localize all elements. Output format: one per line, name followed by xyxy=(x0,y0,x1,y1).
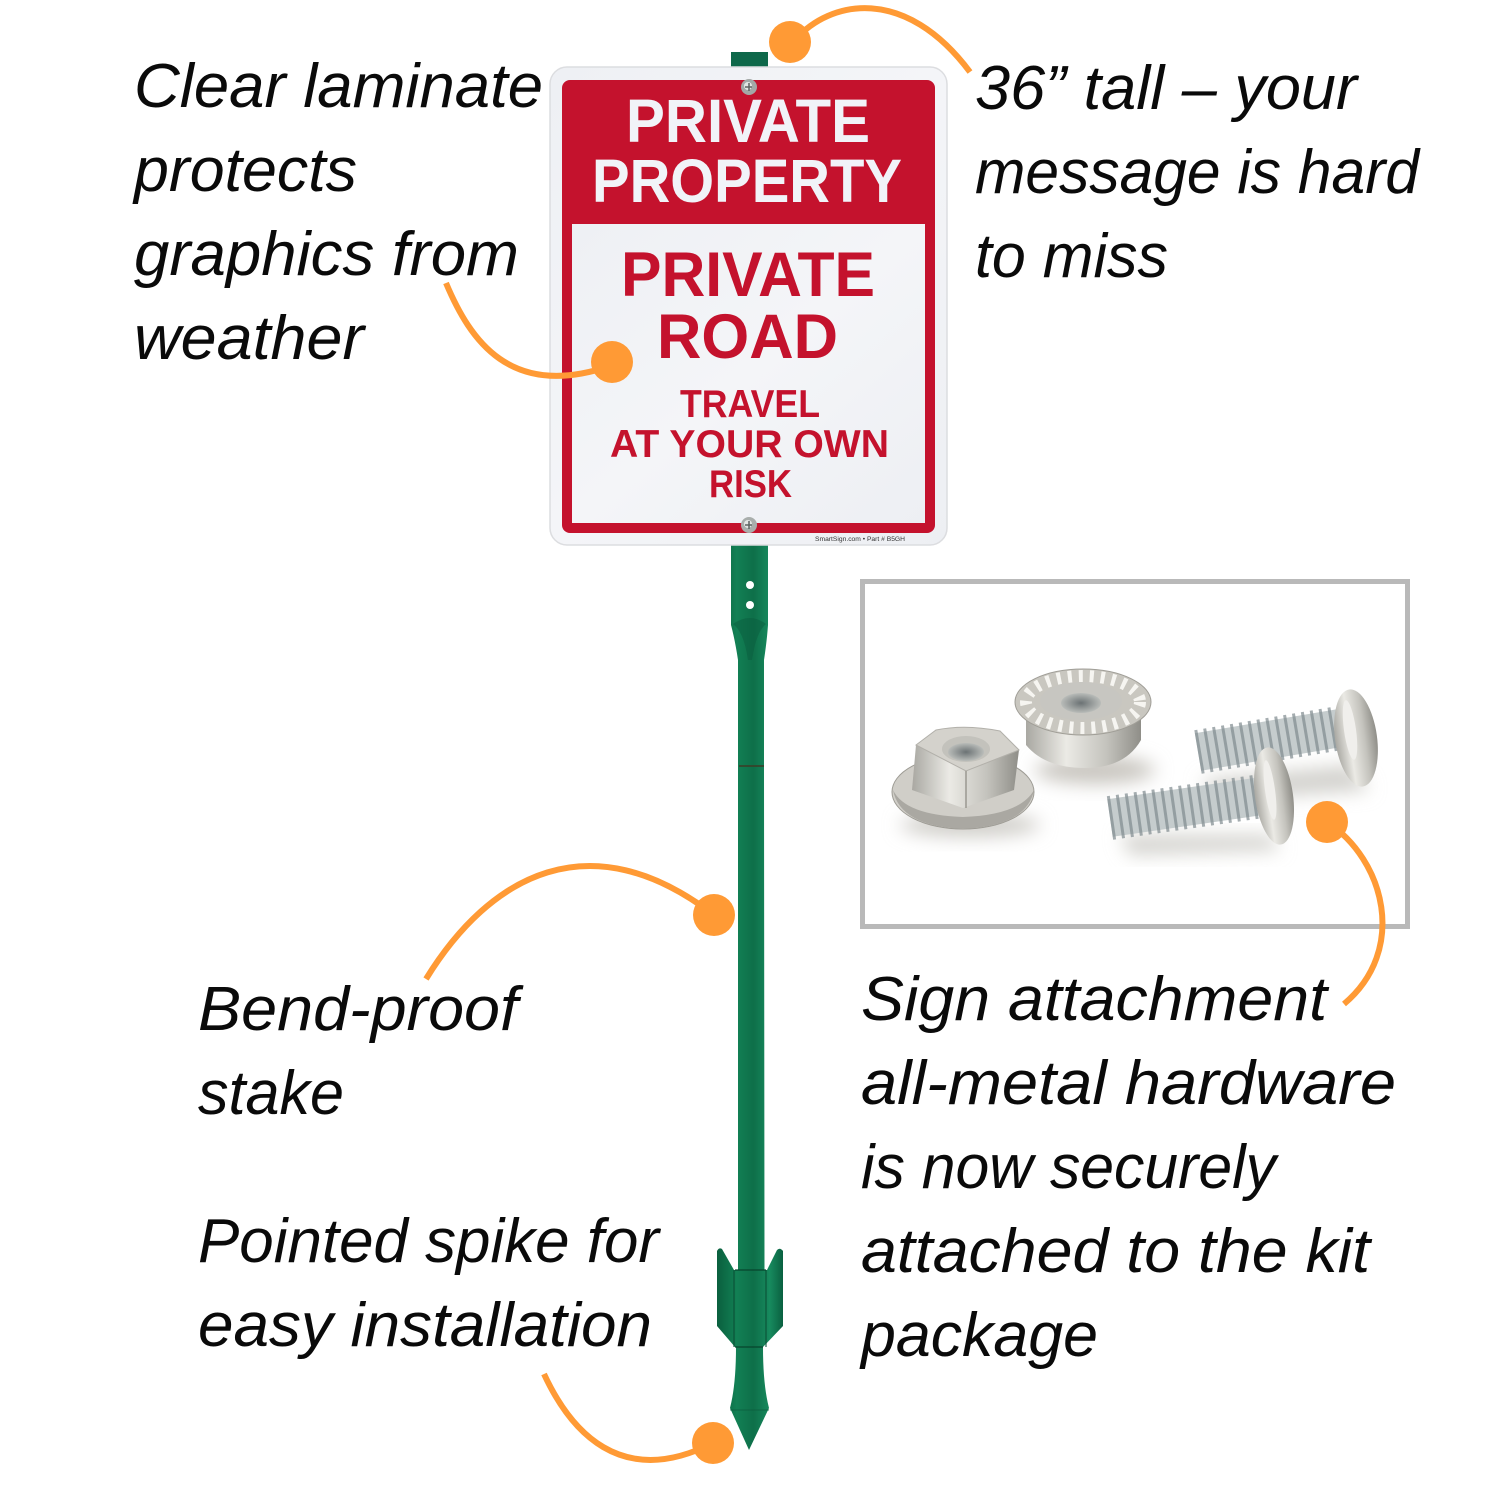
arrow: stake pointer xyxy=(426,866,735,979)
text block: travel at your own risk xyxy=(610,383,889,506)
callout: sign attachment hardware: Sign attachment xyxy=(861,965,1330,1034)
callout: sign attachment hardware xyxy=(859,965,1396,1370)
heading: private property xyxy=(592,87,902,215)
callout: clear laminate: weather xyxy=(134,304,366,373)
icon: green stake with pointed spike xyxy=(717,52,783,1450)
callout: clear laminate: Clear laminate xyxy=(134,52,543,121)
text block: private road xyxy=(621,240,875,372)
callout: sign attachment hardware: all-metal hardware xyxy=(861,1049,1396,1118)
arrow: height pointer xyxy=(769,8,970,72)
callout: sign attachment hardware: package xyxy=(859,1301,1098,1370)
callout: pointed spike: Pointed spike for xyxy=(198,1207,661,1276)
icon: flange nut rear xyxy=(1015,669,1155,784)
panel: hardware photo xyxy=(862,582,1408,926)
callout: pointed spike xyxy=(198,1207,661,1360)
text block: travel at your own risk: AT YOUR OWN xyxy=(610,423,889,466)
arrow: laminate pointer xyxy=(446,283,633,383)
panel: sign xyxy=(550,67,947,545)
arrow: hardware pointer xyxy=(1306,801,1382,1004)
callout: clear laminate: graphics from xyxy=(134,220,519,289)
text block: travel at your own risk: RISK xyxy=(709,463,792,506)
icon: flange nut front xyxy=(892,727,1040,837)
icon: bolt front xyxy=(1110,745,1300,855)
callout: 36 inch tall xyxy=(975,54,1421,291)
callout: 36 inch tall: message is hard xyxy=(975,138,1421,207)
callout: sign attachment hardware: attached to the kit xyxy=(861,1217,1373,1286)
text block: travel at your own risk: TRAVEL xyxy=(680,383,820,426)
heading: private property: PRIVATE xyxy=(626,87,870,155)
callout: sign attachment hardware: is now securely xyxy=(861,1133,1280,1202)
callout: clear laminate: protects xyxy=(132,136,357,205)
callout: bend-proof stake: stake xyxy=(198,1059,344,1128)
text block: private road: ROAD xyxy=(657,302,838,372)
callout: clear laminate xyxy=(132,52,543,373)
text block: part number: SmartSign.com • Part # B5GH xyxy=(815,536,905,543)
callout: 36 inch tall: to miss xyxy=(975,222,1168,291)
icon: bolt rear xyxy=(1198,687,1384,800)
icon: bottom screw xyxy=(741,517,757,533)
arrow: spike pointer xyxy=(544,1374,734,1464)
callout: pointed spike: easy installation xyxy=(198,1291,652,1360)
heading: private property: PROPERTY xyxy=(592,147,902,215)
callout: bend-proof stake: Bend-proof xyxy=(198,975,524,1044)
callout: 36 inch tall: 36” tall – your xyxy=(975,54,1359,123)
text block: private road: PRIVATE xyxy=(621,240,875,310)
callout: bend-proof stake xyxy=(198,975,524,1128)
icon: top screw xyxy=(741,79,757,95)
